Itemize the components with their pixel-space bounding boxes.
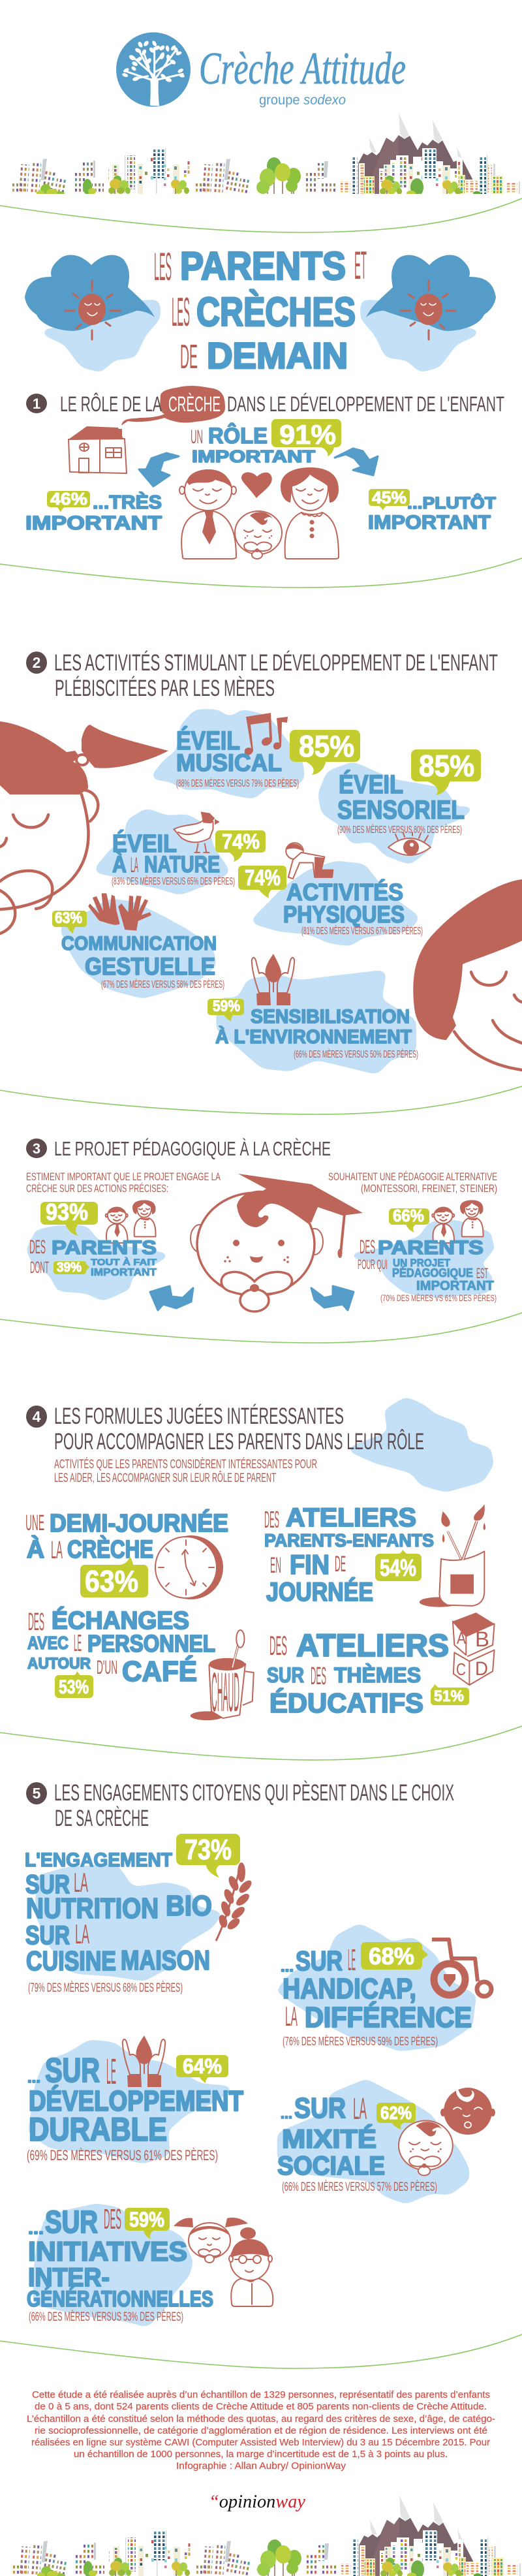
bubble 74% bbox=[215, 830, 266, 862]
icon: hands holding leaf bbox=[252, 954, 294, 1005]
panel: mixité sociale: MIXITÉ bbox=[282, 2124, 376, 2154]
icon: girl with pigtails bbox=[174, 2218, 248, 2263]
bubble 85% bbox=[290, 729, 360, 775]
panel: nutrition bio et cuisine maison: (79% DES MÈRES VERSUS 68% DES PÈRES) bbox=[28, 1981, 183, 1995]
panel: ateliers parents-enfants: EN bbox=[270, 1553, 281, 1578]
text: CHAUD bbox=[211, 1661, 239, 1723]
bubble 39%: 39% bbox=[57, 1260, 82, 1275]
section 3 heading: LE PROJET PÉDAGOGIQUE À LA CRÈCHE bbox=[54, 1137, 331, 1160]
stat: 45% plutôt important: IMPORTANT bbox=[368, 512, 491, 533]
panel: 66% des parents: IMPORTANT bbox=[416, 1279, 494, 1293]
icon: wheelchair bbox=[432, 1940, 491, 1996]
panel: éveil musical: ÉVEIL bbox=[176, 726, 240, 755]
number badge 3 bbox=[26, 1139, 47, 1158]
section 1 heading: CRÈCHE bbox=[168, 392, 221, 416]
panel: activités physiques: (81% DES MÈRES VERSUS 67% DES PÈRES) bbox=[301, 926, 423, 937]
stat: 45% plutôt important bbox=[368, 488, 496, 533]
panel: 93% des parents: DONT bbox=[30, 1259, 49, 1277]
cloud bbox=[254, 864, 416, 943]
panel: développement durable: (69% DES MÈRES VERSUS 61% DES PÈRES) bbox=[27, 2147, 218, 2163]
panel: initiatives intergénérationnelles: SUR bbox=[45, 2205, 98, 2240]
icon: house bbox=[69, 426, 127, 473]
logo wordmark: Crèche Attitude bbox=[199, 44, 406, 94]
icon: mug bbox=[191, 1630, 254, 1723]
icon: eye bbox=[388, 832, 431, 855]
section 4 heading: ACTIVITÉS QUE LES PARENTS CONSIDÈRENT INTÉRESSANTES POUR bbox=[54, 1458, 317, 1471]
cloud bbox=[281, 2082, 466, 2201]
bubble 59% bbox=[207, 997, 244, 1022]
bubble 91%: 91% bbox=[279, 419, 336, 450]
panel: développement durable: DÉVELOPPEMENT bbox=[29, 2084, 243, 2117]
illustration: baby with graduation cap bbox=[191, 1174, 363, 1312]
bubble 59%: 59% bbox=[129, 2208, 164, 2231]
panel: ateliers sur des thèmes éducatifs: THÈMES bbox=[334, 1663, 421, 1687]
panel: éveil sensoriel: ÉVEIL bbox=[339, 770, 403, 799]
panel: développement durable: SUR bbox=[45, 2052, 100, 2090]
bubble 59%: 59% bbox=[213, 997, 240, 1015]
arrow right bbox=[335, 448, 378, 475]
panel: handicap, la différence: ... bbox=[281, 1958, 294, 1975]
text block: methodology: L’échantillon a été constitué selon la méthode des quotas, au regard des critères de sexe, d’âge, de catégo- bbox=[27, 2414, 495, 2425]
bubble 62%: 62% bbox=[380, 2103, 412, 2123]
panel: demi-journée à la crèche: LA bbox=[51, 1537, 63, 1564]
illustration: girl right bbox=[413, 879, 522, 1070]
panel: éveil à la nature: À bbox=[112, 851, 127, 877]
logo: Crèche Attitude bbox=[116, 33, 406, 108]
panel: initiatives intergénérationnelles: DES bbox=[104, 2203, 121, 2235]
panel: ateliers parents-enfants: PARENTS-ENFANTS bbox=[264, 1530, 434, 1550]
icon: two hands bbox=[88, 893, 151, 931]
icon: clock bbox=[155, 1535, 223, 1599]
panel: sensibilisation à l'environnement: (66% DES MÈRES VERSUS 50% DES PÈRES) bbox=[294, 1049, 418, 1060]
number badge 1: 1 bbox=[33, 396, 40, 412]
panel: initiatives intergénérationnelles: (66% DES MÈRES VERSUS 53% DES PÈRES) bbox=[29, 2310, 183, 2324]
stat: 46% très important: ...TRÈS bbox=[93, 491, 162, 513]
text block: methodology: un échantillon de 1000 personnes, la marge d’incertitude est de 1,5 à 3 points au plus. bbox=[74, 2449, 448, 2460]
cloud bbox=[281, 1927, 472, 2048]
panel: mixité sociale bbox=[277, 2082, 495, 2201]
bubble 63% bbox=[52, 909, 87, 934]
panel: éveil à la nature: (83% DES MÈRES VERSUS 65% DES PÈRES) bbox=[112, 876, 235, 887]
bubble 73%: 73% bbox=[185, 1834, 232, 1866]
section 2 heading: PLÉBISCITÉES PAR LES MÈRES bbox=[55, 676, 275, 701]
logo: opinionway: “opinionway bbox=[209, 2491, 305, 2512]
panel: ateliers sur des thèmes éducatifs: SUR bbox=[267, 1663, 304, 1687]
panel: communication gestuelle: (67% DES MÈRES VERSUS 58% DES PÈRES) bbox=[101, 979, 224, 990]
panel: nutrition bio et cuisine maison bbox=[25, 1834, 254, 1995]
stat: un rôle 91% important: UN bbox=[191, 426, 203, 448]
icon: abc blocks: C bbox=[456, 1659, 466, 1679]
stat: 46% très important: IMPORTANT bbox=[25, 512, 162, 534]
panel: 66% des parents: EST bbox=[476, 1265, 488, 1281]
text block: methodology: rie socioprofessionnelle, de catégorie d’agglomération et de région de résidence. Les interviews ont été bbox=[35, 2426, 487, 2436]
title: CRÈCHES bbox=[196, 290, 356, 335]
text block: methodology: Infographie : Allan Aubry/ OpinionWay bbox=[176, 2461, 346, 2472]
bubble 51% bbox=[431, 1684, 469, 1705]
icon: parents bbox=[106, 1200, 156, 1243]
panel: nutrition bio et cuisine maison: LA bbox=[75, 1919, 89, 1949]
panel: nutrition bio et cuisine maison: BIO bbox=[166, 1890, 212, 1922]
arrow right bbox=[311, 1286, 354, 1310]
bubble 46%: 46% bbox=[50, 489, 87, 509]
bubble 68%: 68% bbox=[369, 1943, 414, 1970]
text block: methodology: réalisées en ligne sur système CAWI (Computer Assisted Web Interview) du 3 au 15 Décembre 2015. Pour bbox=[31, 2438, 490, 2448]
cloud bbox=[220, 973, 413, 1071]
panel: communication gestuelle bbox=[52, 893, 224, 996]
panel: 66% des parents: DES bbox=[360, 1236, 375, 1258]
arrow left bbox=[150, 1286, 193, 1310]
section 4 heading: LES FORMULES JUGÉES INTÉRESSANTES bbox=[54, 1404, 344, 1429]
panel: initiatives intergénérationnelles: INTER- bbox=[28, 2263, 110, 2292]
text block: estiment important: CRÈCHE SUR DES ACTIONS PRÉCISES: bbox=[26, 1182, 168, 1195]
panel: handicap, la différence: HANDICAP, bbox=[283, 1973, 416, 2005]
number badge 5 bbox=[26, 1782, 47, 1804]
cloud bbox=[30, 1229, 163, 1298]
panel: 93% des parents: TOUT À FAIT bbox=[91, 1257, 157, 1267]
bubble 85%: 85% bbox=[299, 729, 354, 763]
section 3 heading bbox=[26, 1137, 331, 1160]
skyline illustration bbox=[11, 113, 520, 196]
number badge 4: 4 bbox=[33, 1408, 41, 1425]
icon: parents bbox=[432, 1200, 484, 1243]
panel: activités physiques: PHYSIQUES bbox=[283, 901, 405, 928]
panel: handicap, la différence: SUR bbox=[296, 1945, 343, 1976]
cloud bbox=[356, 1223, 491, 1295]
panel: échanges autour d'un café bbox=[27, 1606, 254, 1723]
panel: ateliers parents-enfants: JOURNÉE bbox=[266, 1577, 373, 1607]
bubble 53%: 53% bbox=[59, 1676, 89, 1698]
panel: nutrition bio et cuisine maison: MAISON bbox=[121, 1945, 210, 1975]
panel: ateliers parents-enfants: DE bbox=[335, 1552, 346, 1577]
panel: 93% des parents: DES bbox=[29, 1236, 46, 1258]
icon: wheat bbox=[216, 1862, 254, 1941]
panel: ateliers parents-enfants: DES bbox=[264, 1506, 279, 1533]
stat: un rôle 91% important: RÔLE bbox=[208, 423, 268, 448]
panel: 66% des parents bbox=[356, 1200, 497, 1303]
bubble 45%: 45% bbox=[372, 488, 407, 507]
panel: demi-journée à la crèche: À bbox=[27, 1535, 44, 1563]
cloud bbox=[31, 2043, 228, 2160]
panel: mixité sociale: ... bbox=[281, 2105, 292, 2122]
bubble 46% bbox=[47, 489, 90, 512]
bubble 59% bbox=[125, 2208, 170, 2239]
panel: communication gestuelle: COMMUNICATION bbox=[61, 933, 217, 954]
panel: ateliers sur des thèmes éducatifs: ATELIERS bbox=[296, 1629, 449, 1663]
panel: handicap, la différence: LA bbox=[285, 2001, 298, 2032]
panel: handicap, la différence bbox=[281, 1927, 491, 2048]
title: LES bbox=[172, 290, 190, 335]
panel: initiatives intergénérationnelles: GÉNÉRATIONNELLES bbox=[27, 2287, 213, 2312]
section 1 heading bbox=[26, 386, 504, 426]
cloud bbox=[321, 765, 469, 861]
panel: ateliers parents-enfants bbox=[264, 1503, 485, 1607]
bubble 53% bbox=[55, 1671, 93, 1698]
icon: baby red bbox=[440, 2086, 495, 2135]
bubble 54%: 54% bbox=[380, 1554, 416, 1581]
panel: initiatives intergénérationnelles bbox=[27, 2203, 273, 2324]
illustration: father bbox=[179, 469, 236, 559]
cloud behind section 4 heading bbox=[352, 1400, 491, 1489]
title: LES bbox=[154, 245, 172, 289]
panel: développement durable: ... bbox=[27, 2069, 40, 2086]
panel: éveil à la nature: NATURE bbox=[144, 852, 220, 877]
text: ET bbox=[354, 243, 367, 287]
panel: mixité sociale: LA bbox=[353, 2092, 367, 2126]
panel: 93% des parents: PARENTS bbox=[52, 1237, 157, 1259]
panel: ateliers sur des thèmes éducatifs bbox=[267, 1612, 495, 1718]
panel: échanges autour d'un café: PERSONNEL bbox=[87, 1630, 215, 1657]
bubble 91% bbox=[271, 419, 341, 456]
panel: initiatives intergénérationnelles: INITIATIVES bbox=[28, 2236, 187, 2267]
panel: éveil à la nature: LA bbox=[130, 853, 138, 877]
icon: music notes bbox=[245, 713, 288, 755]
panel: nutrition bio et cuisine maison: LA bbox=[74, 1867, 88, 1898]
icon: hands holding leaf bbox=[123, 2035, 165, 2087]
icon: abc blocks: B bbox=[475, 1627, 489, 1651]
section 5 heading: DE SA CRÈCHE bbox=[55, 1806, 149, 1831]
section 5 heading bbox=[26, 1780, 454, 1831]
panel: mixité sociale: SOCIALE bbox=[277, 2152, 385, 2180]
title cloud with sun: right bbox=[363, 255, 496, 369]
panel: communication gestuelle: GESTUELLE bbox=[85, 953, 215, 980]
number badge 2: 2 bbox=[33, 654, 40, 671]
title: DE bbox=[180, 338, 198, 376]
illustration: heart bbox=[241, 472, 272, 498]
bubble 51%: 51% bbox=[434, 1688, 464, 1705]
text block: estiment important bbox=[26, 1170, 221, 1195]
panel: initiatives intergénérationnelles: ... bbox=[28, 2220, 44, 2238]
bubble 64%: 64% bbox=[183, 2054, 222, 2078]
bubble 93%: 93% bbox=[46, 1199, 88, 1225]
logo tagline: groupe sodexo bbox=[259, 93, 346, 108]
bubble 66%: 66% bbox=[393, 1206, 424, 1225]
icon: baby outline bbox=[399, 2120, 453, 2175]
illustration: baby bbox=[235, 511, 282, 559]
panel: développement durable: LE bbox=[106, 2050, 116, 2092]
panel: handicap, la différence: LE bbox=[348, 1943, 356, 1977]
panel: sensibilisation à l'environnement: À L'ENVIRONNEMENT bbox=[215, 1026, 412, 1048]
bubble 74% bbox=[238, 866, 286, 898]
panel: échanges autour d'un café: ÉCHANGES bbox=[52, 1606, 189, 1635]
number badge 4 bbox=[26, 1406, 47, 1428]
bubble 85%: 85% bbox=[419, 749, 474, 783]
bubble 73% bbox=[176, 1834, 240, 1877]
icon: abc blocks: A bbox=[457, 1628, 467, 1648]
callout cloud behind crèche bbox=[121, 386, 225, 426]
cloud bbox=[38, 1867, 218, 1978]
bubble 74%: 74% bbox=[245, 866, 281, 890]
panel: éveil sensoriel: SENSORIEL bbox=[337, 796, 465, 825]
bubble 93% bbox=[40, 1199, 98, 1236]
panel: nutrition bio et cuisine maison: NUTRITION bbox=[26, 1893, 159, 1924]
panel: demi-journée à la crèche bbox=[25, 1509, 228, 1599]
bubble 66% bbox=[389, 1206, 429, 1233]
cloud bbox=[63, 902, 213, 996]
panel: sensibilisation à l'environnement: SENSIBILISATION bbox=[251, 1006, 410, 1028]
stat: un rôle 91% important: IMPORTANT bbox=[192, 447, 315, 466]
panel: ateliers parents-enfants: ATELIERS bbox=[286, 1503, 416, 1532]
panel: échanges autour d'un café: D'UN bbox=[97, 1657, 117, 1678]
illustration: mother bbox=[281, 467, 339, 559]
panel: sensibilisation à l'environnement bbox=[207, 954, 418, 1071]
panel: nutrition bio et cuisine maison: CUISINE bbox=[26, 1945, 116, 1976]
section 2 heading bbox=[26, 650, 498, 701]
panel: éveil à la nature bbox=[97, 811, 266, 892]
skyline illustration bottom bbox=[12, 2495, 521, 2576]
panel: nutrition bio et cuisine maison: SUR bbox=[25, 1870, 70, 1899]
bubble 74%: 74% bbox=[222, 830, 260, 853]
panel: éveil sensoriel bbox=[321, 749, 481, 861]
panel: ateliers sur des thèmes éducatifs: ÉDUCATIFS bbox=[269, 1688, 423, 1718]
panel: nutrition bio et cuisine maison: SUR bbox=[25, 1921, 70, 1950]
cloud bbox=[155, 713, 301, 796]
panel: handicap, la différence: DIFFÉRENCE bbox=[305, 2001, 472, 2034]
bubble 68% bbox=[361, 1942, 428, 1970]
illustration: girl left bbox=[0, 721, 168, 934]
section 4 heading bbox=[26, 1404, 424, 1485]
icon: grandmother bbox=[229, 2227, 273, 2306]
panel: mixité sociale: SUR bbox=[294, 2092, 346, 2124]
panel: ateliers sur des thèmes éducatifs: DES bbox=[269, 1630, 287, 1661]
icon: brushes in cup bbox=[420, 1504, 485, 1607]
panel: 66% des parents: UN PROJET bbox=[393, 1257, 451, 1269]
title: PARENTS bbox=[180, 244, 346, 288]
number badge 5: 5 bbox=[33, 1785, 41, 1802]
panel: éveil musical bbox=[155, 713, 360, 796]
number badge 3: 3 bbox=[33, 1140, 40, 1157]
icon: hen bbox=[174, 811, 220, 853]
panel: développement durable bbox=[27, 2035, 243, 2163]
title cloud with sun: left bbox=[25, 255, 157, 369]
text block: souhaitent une pédagogie alternative bbox=[328, 1170, 497, 1195]
number badge 2 bbox=[26, 652, 47, 674]
panel: éveil à la nature: ÉVEIL bbox=[112, 829, 177, 858]
section 1 heading: LE RÔLE DE LA bbox=[60, 392, 162, 416]
title bbox=[154, 243, 367, 376]
panel: éveil musical: (88% DES MÈRES VERSUS 79% DES PÈRES) bbox=[176, 778, 299, 789]
bubble 64% bbox=[176, 2054, 228, 2083]
section 4 heading: LES AIDER, LES ACCOMPAGNER SUR LEUR RÔLE DE PARENT bbox=[54, 1471, 276, 1485]
panel: activités physiques bbox=[238, 843, 423, 943]
bubble 62% bbox=[376, 2103, 416, 2129]
cloud bbox=[97, 811, 226, 892]
text block: methodology: Cette étude a été réalisée auprès d’un échantillon de 1329 personnes, représentatif des parents d’enfants bbox=[32, 2390, 490, 2400]
panel: 93% des parents: IMPORTANT bbox=[91, 1267, 157, 1278]
text block: methodology bbox=[27, 2390, 495, 2472]
stat: 45% plutôt important: ...PLUTÔT bbox=[407, 493, 496, 512]
logo circle with tree bbox=[116, 33, 191, 107]
arrow left bbox=[139, 453, 179, 486]
bubble 63%: 63% bbox=[85, 1564, 138, 1598]
icon: abc blocks: D bbox=[475, 1658, 488, 1680]
icon: crawling child bbox=[286, 843, 333, 879]
panel: demi-journée à la crèche: CRÈCHE bbox=[67, 1535, 153, 1563]
panel: 66% des parents: PARENTS bbox=[378, 1237, 484, 1259]
panel: demi-journée à la crèche: UNE bbox=[25, 1511, 44, 1535]
panel: éveil musical: MUSICAL bbox=[176, 749, 282, 776]
panel: ateliers parents-enfants: FIN bbox=[290, 1549, 330, 1580]
panel: développement durable: DURABLE bbox=[29, 2111, 167, 2148]
number badge 1 bbox=[26, 394, 47, 413]
panel: échanges autour d'un café: LE bbox=[74, 1629, 82, 1656]
bubble 63%: 63% bbox=[55, 909, 82, 927]
cloud bbox=[37, 2207, 190, 2324]
panel: 66% des parents: POUR QUI bbox=[358, 1257, 388, 1272]
icon: abc blocks bbox=[453, 1612, 495, 1685]
panel: échanges autour d'un café: AVEC bbox=[27, 1633, 69, 1653]
stat: 46% très important bbox=[25, 489, 162, 534]
panel: échanges autour d'un café: AUTOUR bbox=[27, 1655, 91, 1673]
panel: nutrition bio et cuisine maison: L'ENGAGEMENT bbox=[25, 1849, 172, 1871]
panel: échanges autour d'un café: CAFÉ bbox=[122, 1655, 197, 1688]
bubble 85% bbox=[411, 749, 481, 795]
panel: activités physiques: ACTIVITÉS bbox=[286, 879, 403, 905]
stat: un rôle 91% important bbox=[191, 419, 341, 466]
title: DEMAIN bbox=[207, 335, 348, 376]
text block: methodology: de 0 à 5 ans, dont 524 parents clients de Crèche Attitude et 805 parents non-clients de Crèche Attitude. bbox=[35, 2402, 487, 2412]
text block: estiment important: ESTIMENT IMPORTANT QUE LE PROJET ENGAGE LA bbox=[26, 1170, 221, 1183]
panel: demi-journée à la crèche: DEMI-JOURNÉE bbox=[50, 1509, 228, 1537]
panel: échanges autour d'un café: DES bbox=[28, 1609, 44, 1636]
panel: 93% des parents bbox=[29, 1199, 163, 1298]
panel: 66% des parents: PÉDAGOGIQUE bbox=[392, 1266, 473, 1280]
panel: ateliers sur des thèmes éducatifs: DES bbox=[311, 1663, 326, 1690]
